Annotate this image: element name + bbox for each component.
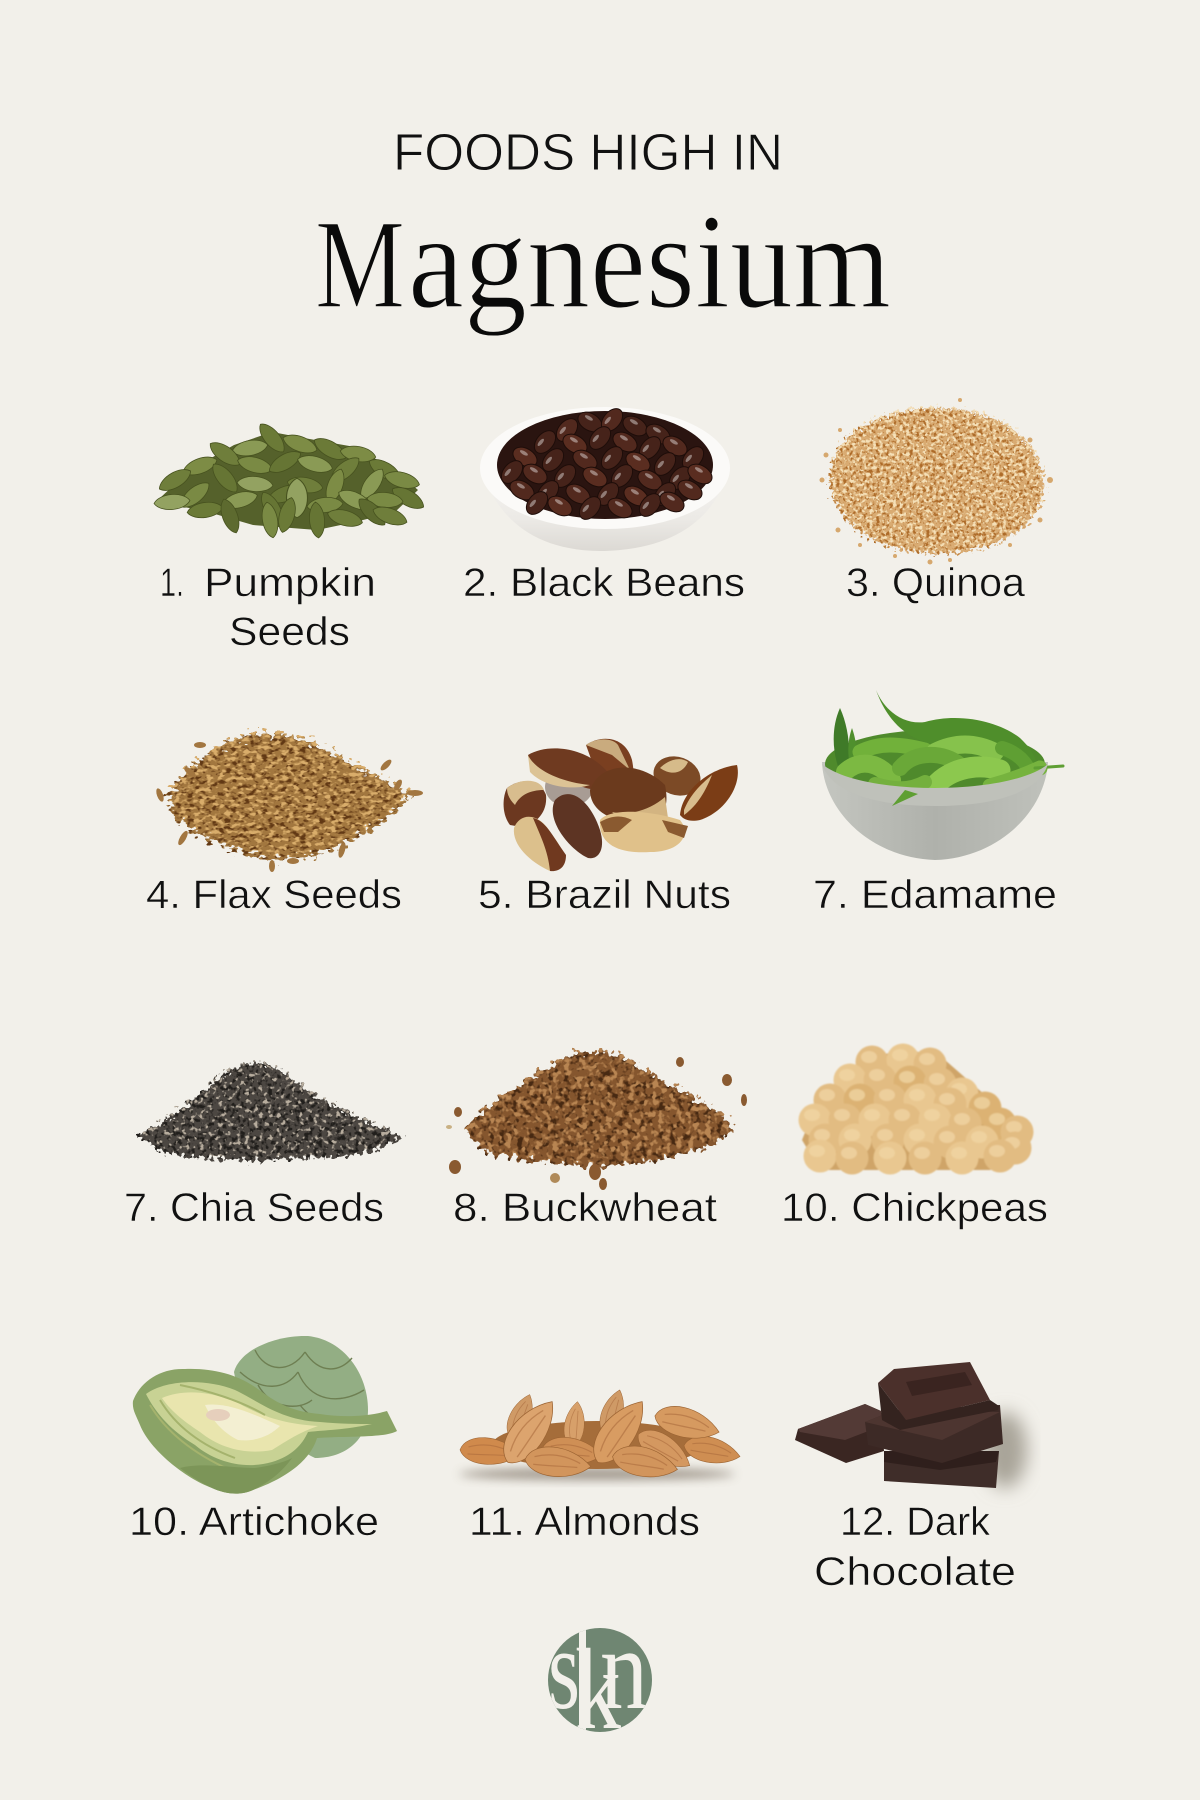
label: pumpkin seeds: Seeds — [229, 610, 350, 654]
title: magnesium: agnesium — [408, 187, 891, 337]
food image: chia seeds — [138, 1063, 402, 1160]
infographic canvas — [126, 134, 1064, 1732]
label: black beans: 2. Black Beans — [463, 561, 745, 605]
logo: skn monogram: s — [548, 1606, 580, 1733]
label: pumpkin seeds: 1. — [160, 561, 184, 605]
food image: edamame bowl — [822, 690, 1063, 860]
logo: skn monogram: k — [575, 1626, 621, 1753]
label: dark chocolate: Chocolate — [814, 1550, 1016, 1594]
label: chickpeas: 10. Chickpeas — [781, 1186, 1048, 1230]
label: flax seeds: 4. Flax Seeds — [146, 873, 402, 917]
label: brazil nuts: 5. Brazil Nuts — [478, 873, 731, 917]
food image: flax seeds — [155, 733, 423, 872]
food image: buckwheat — [446, 1051, 747, 1190]
food image: artichoke — [133, 1336, 397, 1494]
label: edamame: 7. Edamame — [813, 873, 1057, 917]
title: magnesium: M — [315, 195, 405, 335]
label: buckwheat: 8. Buckwheat — [453, 1186, 717, 1230]
label: dark chocolate — [814, 1500, 1016, 1594]
food image: dark chocolate — [795, 1362, 1027, 1488]
label: chia seeds: 7. Chia Seeds — [124, 1186, 384, 1230]
label: pumpkin seeds — [160, 561, 376, 654]
logo: skn monogram: n — [600, 1606, 648, 1733]
label: pumpkin seeds: Pumpkin — [204, 561, 376, 605]
food image: almonds — [459, 1387, 743, 1485]
label: dark chocolate: 12. Dark — [840, 1500, 991, 1544]
label: quinoa: 3. Quinoa — [846, 561, 1026, 605]
food image: pumpkin seeds — [153, 419, 427, 539]
label: almonds: 11. Almonds — [469, 1500, 700, 1544]
label: artichoke: 10. Artichoke — [129, 1500, 379, 1544]
logo: skn monogram — [548, 1628, 652, 1732]
food image: chickpeas — [798, 1044, 1034, 1174]
food image: brazil nuts — [504, 739, 738, 871]
title: foods high in: FOODS HIGH IN — [393, 124, 783, 182]
food image: black beans bowl — [480, 405, 730, 551]
food image: quinoa — [820, 398, 1053, 564]
